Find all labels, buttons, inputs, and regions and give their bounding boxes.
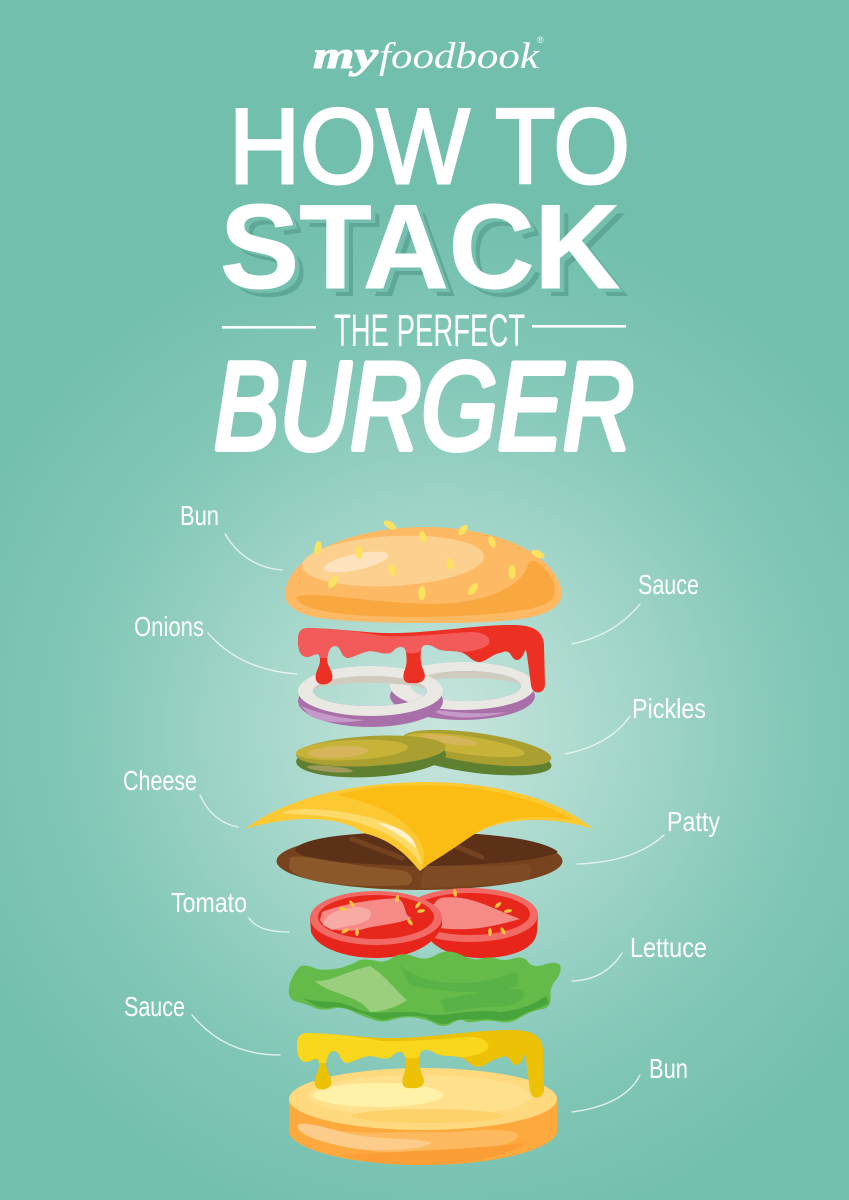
label: sauce bottom: Sauce bbox=[124, 991, 185, 1022]
label: tomato: Tomato bbox=[171, 887, 247, 918]
logo: myfoodbook: foodbook bbox=[379, 36, 540, 77]
label: lettuce: Lettuce bbox=[630, 932, 707, 963]
title: how to: HOW TO bbox=[229, 86, 630, 206]
logo: myfoodbook: ® bbox=[537, 35, 544, 45]
label: bun bottom: Bun bbox=[649, 1053, 688, 1084]
lettuce bbox=[290, 953, 559, 1024]
title: stack: STACK bbox=[225, 184, 625, 318]
left onion ring bbox=[298, 666, 443, 727]
label: onions: Onions bbox=[134, 611, 204, 642]
right onion ring bbox=[390, 662, 535, 720]
top bun bbox=[285, 519, 562, 623]
label: bun top: Bun bbox=[180, 500, 219, 531]
label: patty: Patty bbox=[667, 806, 720, 837]
right tomato bbox=[402, 888, 538, 958]
title: stack: STACK bbox=[229, 188, 629, 322]
patty bbox=[276, 832, 562, 890]
pickles bbox=[295, 723, 553, 782]
red sauce bbox=[298, 625, 545, 692]
onions bbox=[298, 662, 535, 727]
label: pickles: Pickles bbox=[632, 693, 706, 724]
title: stack: STACK bbox=[220, 180, 620, 314]
logo: myfoodbook: my bbox=[313, 35, 378, 77]
left pickle bbox=[295, 732, 447, 781]
bottom bun bbox=[289, 1068, 557, 1165]
right pickle bbox=[401, 723, 553, 782]
label: sauce top: Sauce bbox=[638, 569, 699, 600]
logo: myfoodbook bbox=[313, 35, 544, 77]
cheese bbox=[245, 782, 593, 871]
label: cheese: Cheese bbox=[123, 765, 197, 796]
sesame seeds bbox=[313, 519, 546, 600]
yellow sauce bbox=[297, 1030, 544, 1098]
tomatoes bbox=[310, 888, 538, 958]
title: burger: BURGER bbox=[214, 338, 634, 476]
left tomato bbox=[310, 891, 442, 958]
title: the perfect: THE PERFECT bbox=[334, 305, 525, 356]
leader lines bbox=[192, 534, 664, 1112]
